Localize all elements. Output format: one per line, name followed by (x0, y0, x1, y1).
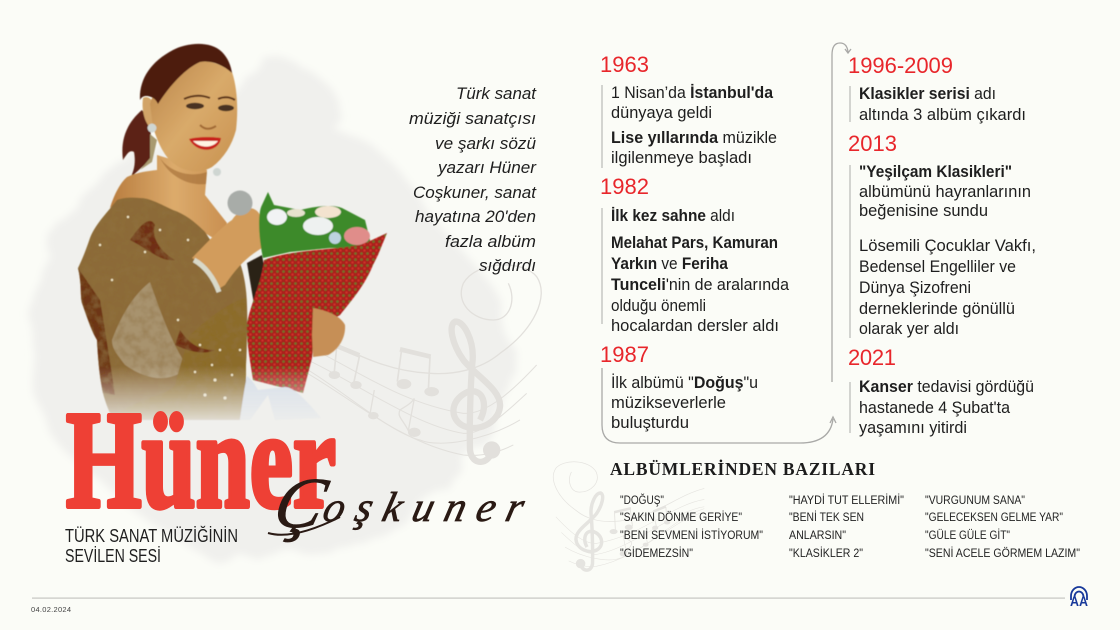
albums list (620, 494, 1080, 560)
timeline column one (600, 52, 789, 432)
1963: dünyaya geldi (611, 104, 712, 122)
flowers (267, 206, 370, 245)
logo (1070, 587, 1088, 609)
1982: 1982 (600, 174, 649, 199)
ribbon (240, 376, 314, 418)
1996-2009: 1996-2009 (848, 53, 953, 78)
1982: İlk kez sahne aldı (611, 207, 735, 225)
intro text: sığdırdı (479, 256, 536, 275)
date: 04.02.2024 (31, 605, 71, 614)
lower hand (312, 308, 345, 357)
head (150, 61, 237, 171)
intro text: Coşkuner, sanat (413, 183, 537, 202)
ear (142, 96, 154, 126)
2013 (848, 131, 1036, 338)
2013: olarak yer aldı (859, 320, 959, 338)
small staff and treble clef (553, 462, 704, 570)
eyes, brows, nose and smile (184, 96, 235, 150)
2021 (848, 345, 1034, 437)
timeline arrows (602, 43, 851, 443)
2021: yaşamını yitirdi (859, 419, 967, 437)
sequins (99, 216, 241, 400)
1982: hocalardan dersler aldı (611, 317, 779, 335)
footer line (32, 598, 1065, 599)
intro text (409, 84, 537, 275)
2013: 2013 (848, 131, 897, 156)
1987: 1987 (600, 342, 649, 367)
logo: AA (1070, 593, 1088, 609)
albums list: "HAYDİ TUT ELLERİMİ" (789, 494, 904, 507)
staff and treble clef (267, 265, 541, 462)
subtitle (65, 525, 238, 566)
2013: albümünü hayranlarının (859, 183, 1031, 201)
albums list: "KLASİKLER 2" (789, 547, 863, 560)
intro text: yazarı Hüner (437, 158, 537, 177)
1963: 1963 (600, 52, 649, 77)
mic body (246, 254, 264, 301)
photo: singer with bouquet (78, 44, 387, 420)
arm and hand (192, 208, 266, 290)
bouquet leaves (259, 192, 372, 258)
2021: Kanser tedavisi gördüğü (859, 378, 1034, 396)
1963 (600, 52, 777, 167)
2013: Lösemili Çocuklar Vakfı, (859, 237, 1036, 255)
subtitle: SEVİLEN SESİ (65, 546, 161, 566)
dress (78, 198, 247, 420)
2013: derneklerinde gönüllü (859, 300, 1015, 318)
1982: olduğu önemli (611, 297, 706, 315)
subtitle: TÜRK SANAT MÜZİĞİNİN (65, 525, 238, 546)
title: Hüner: Hüner (66, 384, 336, 538)
bouquet wrap (247, 233, 387, 393)
1987: buluşturdu (611, 414, 689, 432)
title: Coşkuner (267, 463, 545, 543)
intro text: fazla albüm (445, 232, 536, 251)
1987: müzikseverlerle (611, 394, 726, 412)
1982: Yarkın ve Feriha (611, 255, 729, 273)
albums list: ANLARSIN" (789, 530, 846, 542)
bracelet (194, 260, 219, 292)
1987 (600, 342, 758, 432)
title: Coşkuner: oşkuner (319, 485, 540, 531)
hair (140, 44, 232, 104)
1963: 1 Nisan’da İstanbul'da (611, 84, 774, 102)
2013: Dünya Şizofreni (859, 279, 971, 297)
albums list: "SENİ ACELE GÖRMEM LAZIM" (925, 547, 1080, 560)
2021: 2021 (848, 345, 896, 370)
1982 (600, 174, 789, 335)
albums list: "BENİ TEK SEN (789, 511, 864, 524)
mic head (228, 190, 252, 216)
earrings (140, 124, 221, 176)
albums list: "GİDEMEZSİN" (620, 547, 693, 560)
1996-2009: Klasikler serisi adı (859, 85, 996, 103)
albums list: "GELECEKSEN GELME YAR" (925, 512, 1063, 524)
intro text: Türk sanat (456, 84, 537, 103)
timeline column two (848, 53, 1036, 437)
1996-2009 (848, 53, 1026, 124)
2013: Bedensel Engelliler ve (859, 258, 1016, 276)
1963: ilgilenmeye başladı (611, 149, 752, 167)
2021: hastanede 4 Şubat'ta (859, 399, 1010, 417)
1982: Melahat Pars, Kamuran (611, 234, 778, 252)
albums list: "BENİ SEVMENİ İSTİYORUM" (620, 529, 763, 542)
1982: Tunceli'nin de aralarında (611, 276, 789, 294)
1996-2009: altında 3 albüm çıkardı (859, 106, 1026, 124)
albums list: "DOĞUŞ" (620, 494, 664, 507)
intro text: ve şarkı sözü (435, 134, 537, 153)
timeline bars (602, 85, 850, 433)
albums list: "GÜLE GÜLE GİT" (925, 529, 1010, 542)
intro text: hayatına 20'den (415, 207, 536, 226)
watercolor wash (31, 63, 511, 560)
albums list: "VURGUNUM SANA" (925, 495, 1025, 507)
2013: "Yeşilçam Klasikleri" (859, 163, 1012, 181)
neck and chest (110, 155, 227, 242)
1987: İlk albümü "Doğuş"u (611, 373, 758, 392)
albums list: "SAKIN DÖNME GERİYE" (620, 511, 742, 524)
albums heading: ALBÜMLERİNDEN BAZILARI (610, 459, 875, 479)
ponytail (122, 110, 152, 178)
intro text: müziği sanatçısı (409, 109, 536, 128)
title: Coşkuner: Ç (267, 463, 345, 543)
2013: beğenisine sundu (859, 202, 988, 220)
1963: Lise yıllarında müzikle (611, 129, 777, 147)
neck shadow (160, 158, 207, 184)
